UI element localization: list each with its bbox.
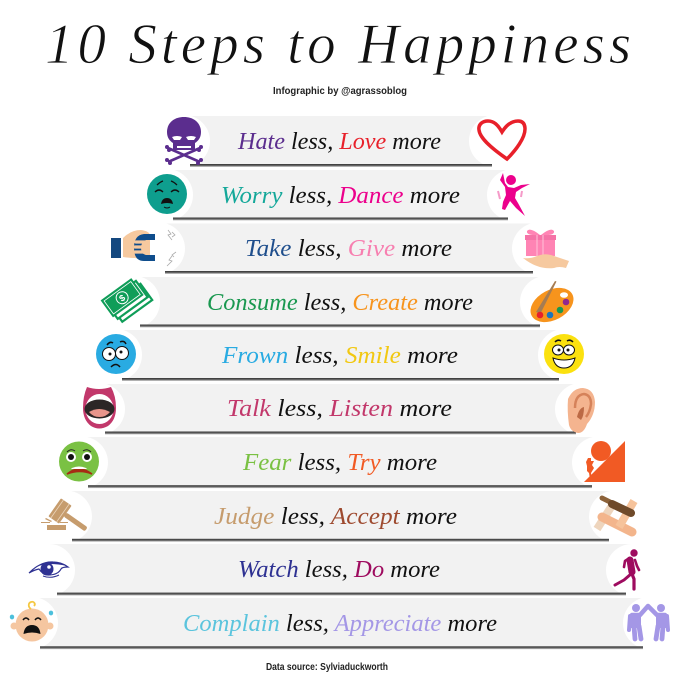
step 4: consume / create	[101, 276, 579, 329]
icon: hand with magnet	[111, 230, 176, 266]
icon: banknotes: $	[117, 293, 127, 304]
step 6: talk / listen	[73, 383, 607, 435]
icon: two people high five	[629, 604, 668, 639]
icon: dancer	[498, 173, 530, 216]
step 2: worry / dance: Worry less, Dance more	[221, 183, 460, 209]
step 1: hate / love: Hate less, Love more	[237, 129, 441, 155]
icon: skull and crossbones	[165, 117, 203, 165]
icon: gavel	[41, 498, 93, 538]
step 6: talk / listen: Talk less, Listen more	[227, 396, 452, 422]
icon: paint palette	[525, 281, 579, 329]
icon: eye	[29, 562, 68, 577]
step 7: fear / try: Fear less, Try more	[242, 450, 437, 476]
step 4: consume / create: Consume less, Create more	[207, 290, 473, 316]
step 5: frown / smile: Frown less, Smile more	[221, 343, 458, 369]
icon: green scared face	[59, 442, 99, 482]
step 10: complain / appreciate	[6, 597, 675, 649]
step 5: frown / smile	[90, 329, 590, 381]
step 1: hate / love	[158, 115, 525, 167]
step 10: complain / appreciate: Complain less, Appreciate more	[183, 611, 497, 637]
step 3: take / give: Take less, Give more	[245, 236, 452, 262]
step 8: judge / accept	[40, 490, 641, 542]
data source credit: Data source: Sylviaduckworth	[266, 662, 388, 673]
icon: hand holding gift	[523, 230, 569, 268]
icon: ear	[568, 388, 595, 433]
icon: worried teal face	[147, 174, 187, 214]
icon: heart outline	[479, 121, 525, 159]
icon: blue frowning face	[96, 334, 136, 374]
icon: walking person	[615, 549, 639, 589]
step 8: judge / accept: Judge less, Accept more	[214, 504, 457, 530]
icon: banknotes	[101, 276, 152, 325]
icon: yellow grinning face	[544, 334, 584, 374]
step 2: worry / dance	[141, 169, 539, 221]
title: 10 Steps to Happiness	[45, 13, 631, 76]
icon: joined hands	[597, 498, 634, 532]
icon: crying baby	[10, 602, 54, 642]
icon: person pushing boulder uphill	[584, 441, 625, 482]
step 3: take / give	[111, 222, 569, 274]
step 7: fear / try	[56, 436, 625, 488]
icon: open mouth	[83, 387, 116, 428]
step 9: watch / do: Watch less, Do more	[238, 557, 440, 583]
subtitle: Infographic by @agrassoblog	[273, 86, 407, 97]
step 9: watch / do	[23, 544, 658, 596]
